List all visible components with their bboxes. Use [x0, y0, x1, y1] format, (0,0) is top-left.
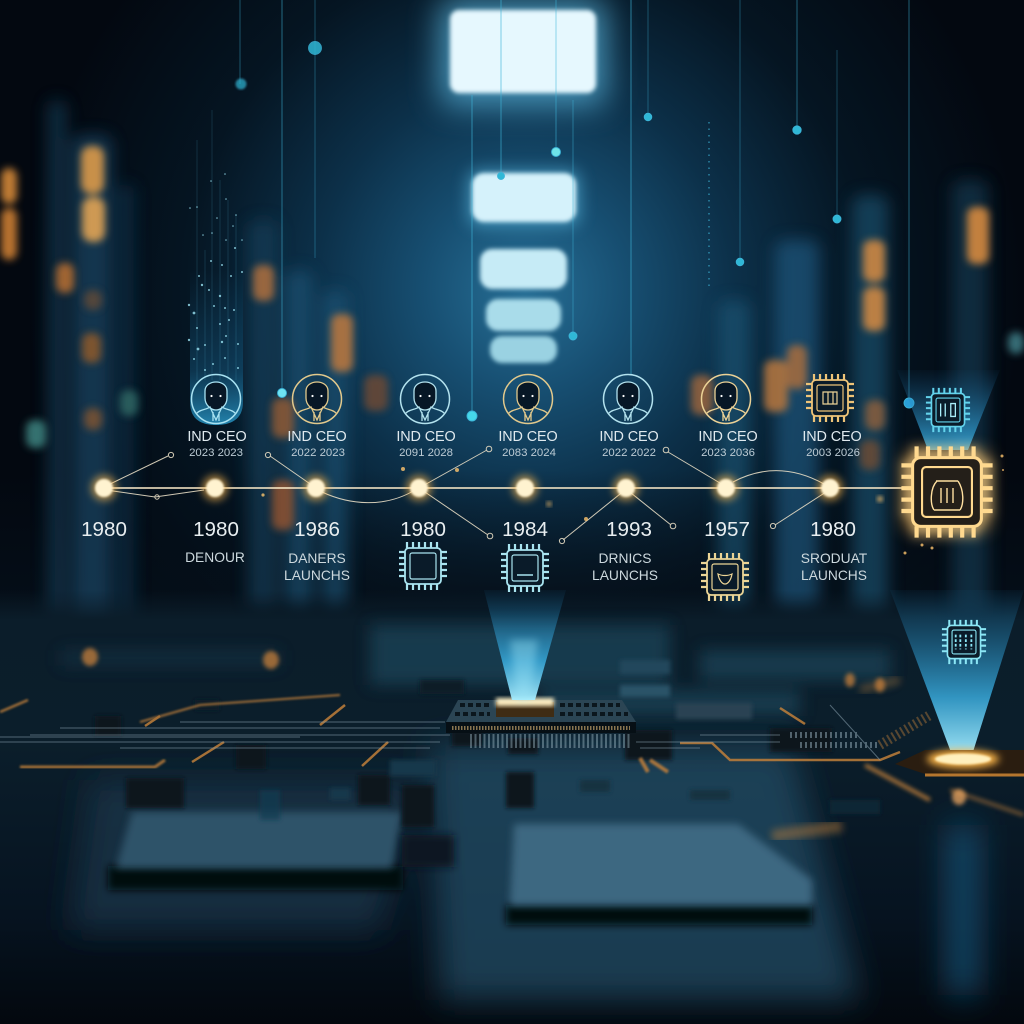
labels CEO: [187, 429, 862, 459]
timeline line: [104, 486, 905, 490]
labels CEO: 2023 2036: [701, 447, 755, 459]
years: 1993: [606, 518, 652, 541]
years: 1986: [294, 518, 340, 541]
years: 1980: [193, 518, 239, 541]
data rain above first portrait: [188, 110, 243, 425]
event labels: DANERS: [288, 551, 346, 566]
hologram beam center: [484, 590, 566, 700]
labels CEO: IND CEO: [187, 429, 247, 445]
labels CEO: 2003 2026: [806, 447, 860, 459]
portrait 1: [192, 374, 240, 424]
horizon haze: [60, 625, 890, 716]
chip icon 1957: [701, 553, 749, 601]
server corridor right: [718, 180, 988, 620]
server corridor left: [48, 100, 348, 625]
portrait 3: [400, 374, 450, 424]
hologram chip right floor: [890, 590, 1024, 775]
bokeh floor lights: [82, 648, 966, 805]
central processor: [446, 698, 636, 741]
labels CEO: IND CEO: [599, 429, 659, 445]
labels CEO: IND CEO: [396, 429, 456, 445]
labels CEO: 2023 2023: [189, 447, 243, 459]
years: 1980: [400, 518, 446, 541]
lower backdrop shade: [0, 470, 1024, 620]
spark particles: [261, 454, 1004, 554]
labels CEO: 2091 2028: [399, 447, 453, 459]
labels CEO: 2083 2024: [502, 447, 556, 459]
mid components: [95, 660, 880, 827]
portrait 6: [702, 374, 750, 424]
bokeh lights: [1, 146, 1024, 530]
event labels: LAUNCHS: [801, 568, 867, 583]
event labels: LAUNCHS: [284, 568, 350, 583]
years: [81, 518, 856, 541]
labels CEO: 2022 2022: [602, 447, 656, 459]
event labels: [185, 550, 868, 583]
branch connectors: [106, 446, 826, 544]
years: 1980: [810, 518, 856, 541]
event labels: DENOUR: [185, 550, 245, 565]
chip icon 1980: [399, 542, 447, 590]
labels CEO: IND CEO: [498, 429, 558, 445]
copper traces: [0, 680, 1024, 836]
portrait 4: [504, 374, 552, 424]
blurred board base: [70, 745, 978, 1000]
years: 1957: [704, 518, 750, 541]
labels CEO: IND CEO: [802, 429, 862, 445]
floor circuit board: [0, 590, 1024, 1024]
hologram chip upper right: [897, 370, 1000, 450]
event labels: DRNICS: [599, 551, 651, 566]
bus traces: [0, 705, 880, 760]
hanging data threads: [236, 0, 914, 421]
labels CEO: 2022 2023: [291, 447, 345, 459]
main glowing chip: [901, 446, 993, 538]
portrait 2: [292, 374, 342, 424]
timeline nodes: [91, 475, 843, 501]
years: 1984: [502, 518, 548, 541]
event labels: LAUNCHS: [592, 568, 658, 583]
large blurred foreground chips: [108, 812, 812, 925]
labels CEO: IND CEO: [287, 429, 347, 445]
years: 1980: [81, 518, 127, 541]
ceiling lights: [440, 0, 606, 363]
labels CEO: IND CEO: [698, 429, 758, 445]
chip icon 1984: [501, 544, 549, 592]
portrait 5: [604, 374, 652, 424]
event labels: SRODUAT: [801, 551, 868, 566]
chip icon top: [806, 374, 854, 422]
